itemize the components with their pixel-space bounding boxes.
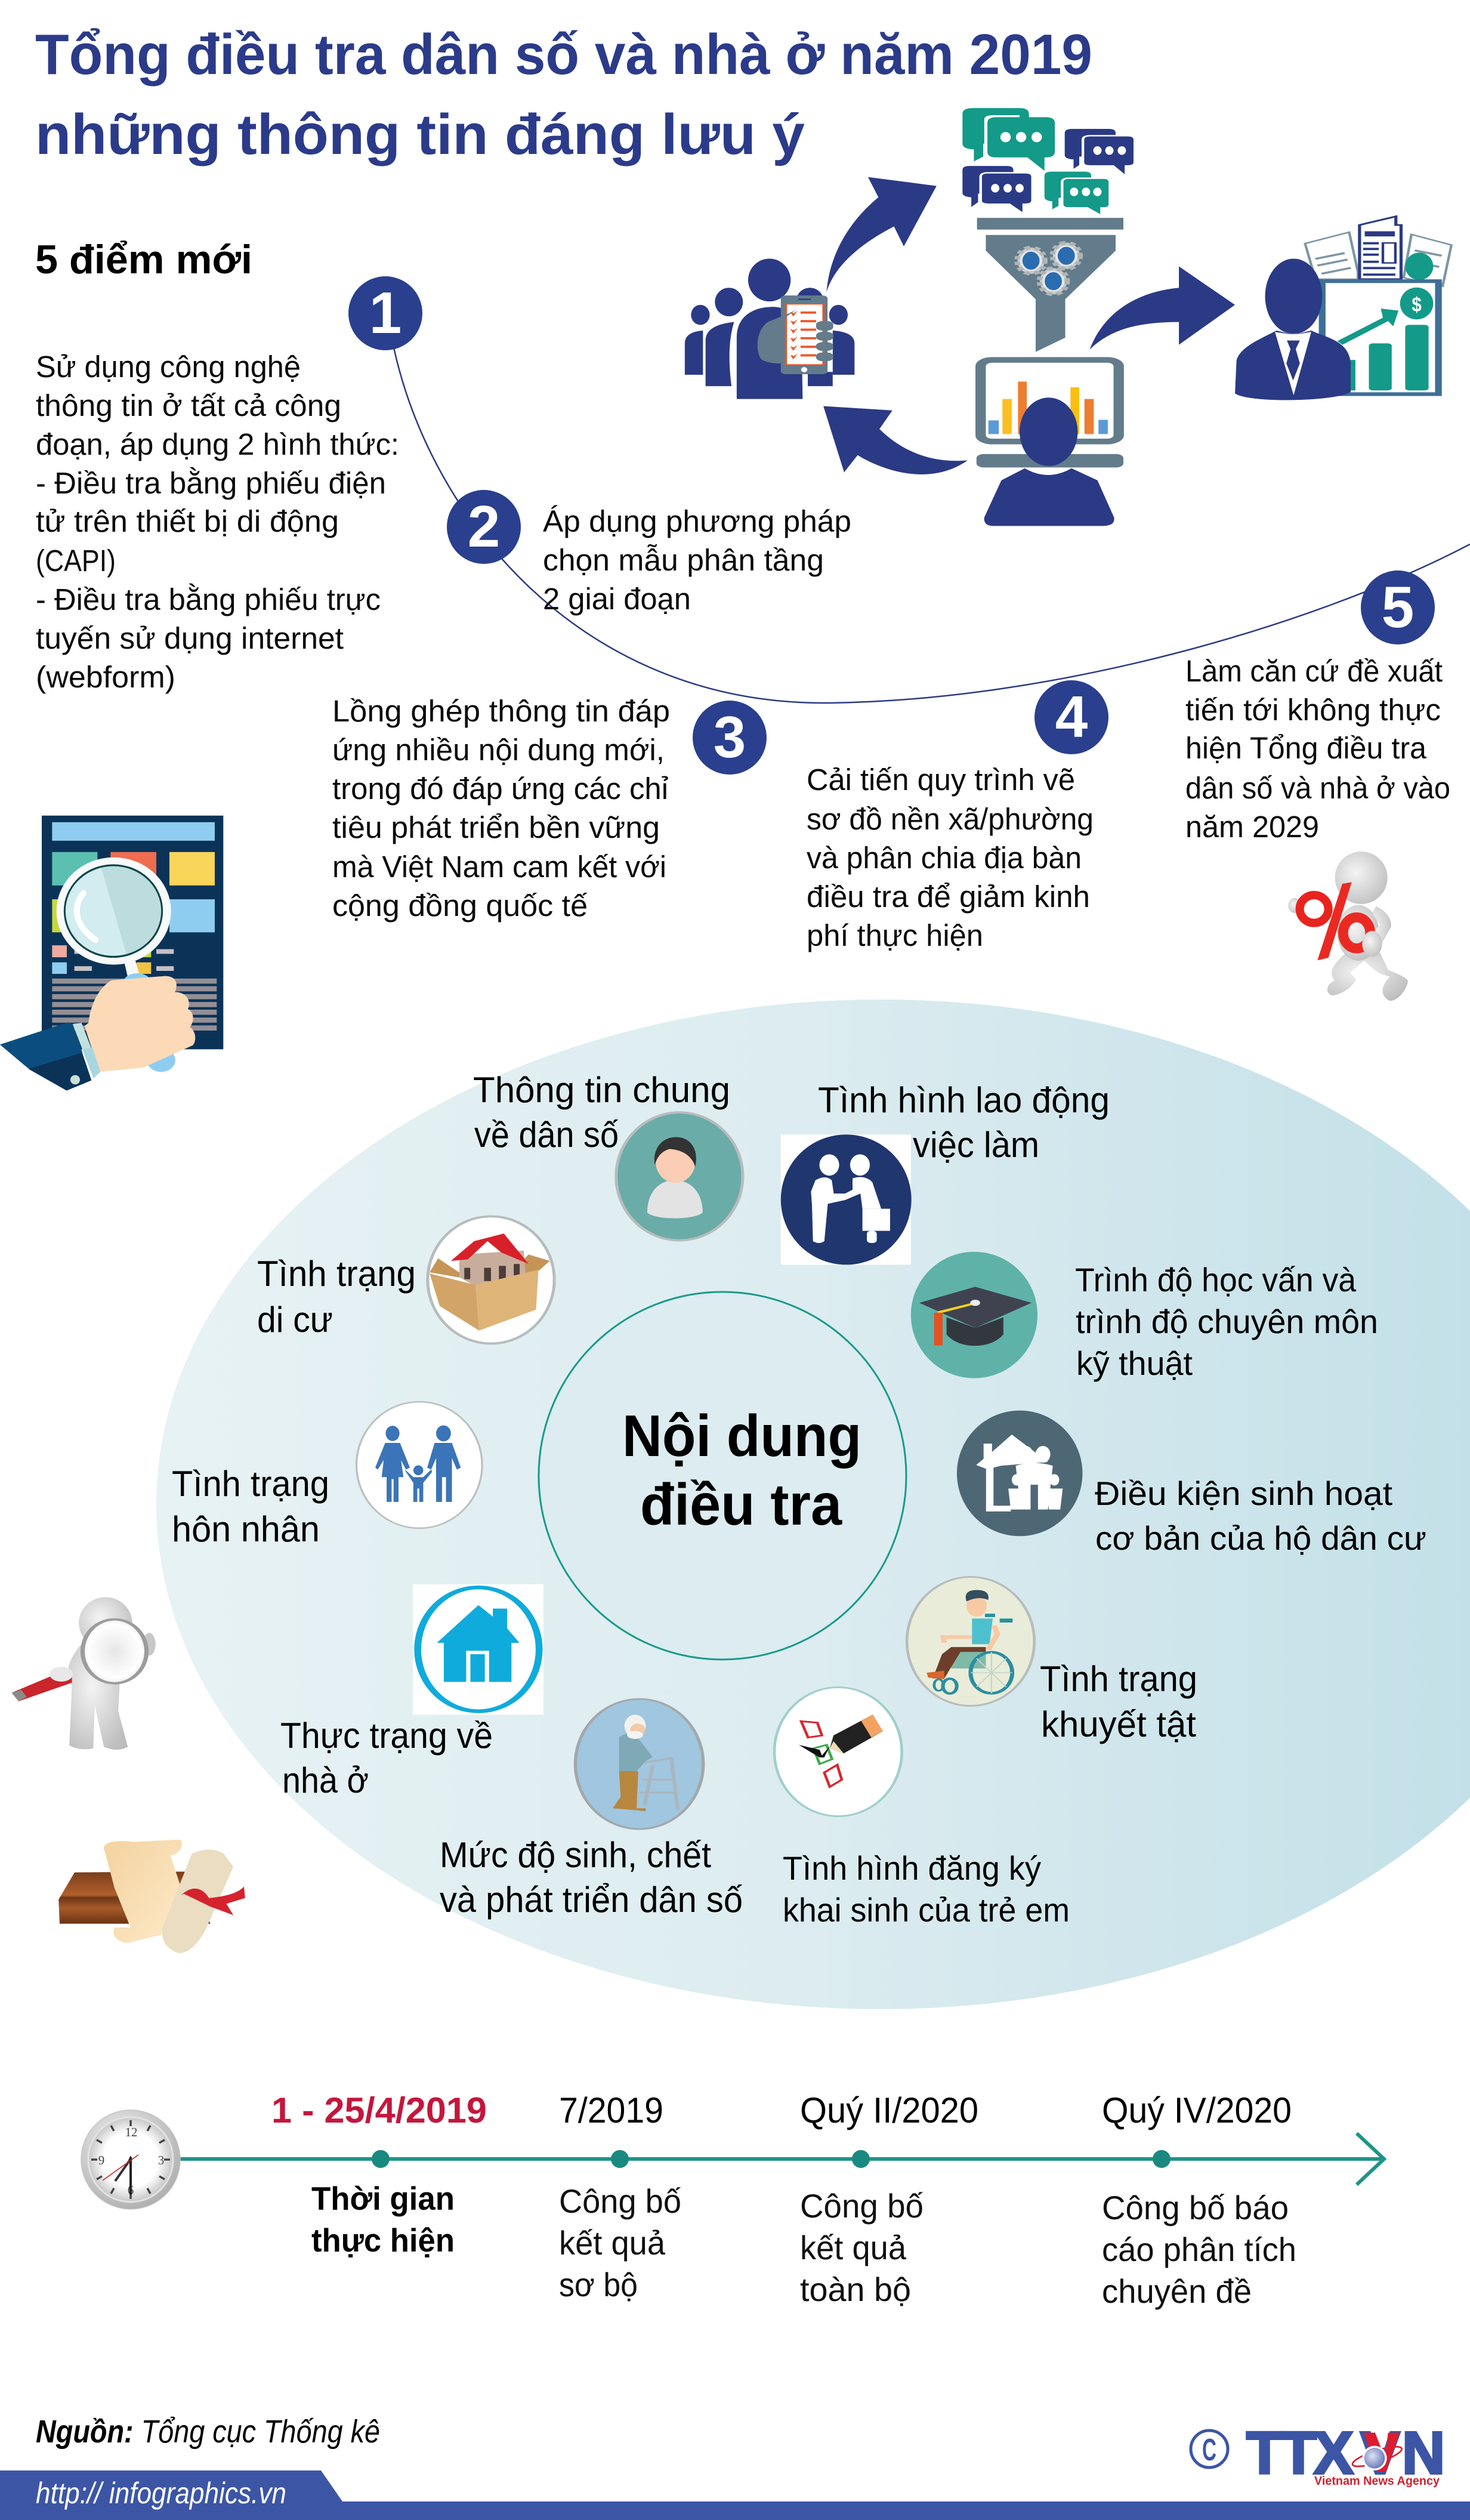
icon: clock: 12 [125, 2125, 137, 2139]
icon: analyst with chart and newspapers [1235, 217, 1452, 400]
logo: TTXVN: C [1202, 2433, 1216, 2467]
text: point 3: mà Việt Nam cam kết với [332, 850, 666, 884]
timeline: 1 - 25/4/2019: thực hiện [311, 2222, 455, 2259]
label: housing: Thực trạng về [280, 1716, 493, 1756]
text: point 1: - Điều tra bằng phiếu trực [36, 582, 381, 616]
label: migration: di cư [257, 1300, 333, 1340]
icon: speech bubbles [962, 108, 1135, 216]
timeline: 1 - 25/4/2019 [271, 2090, 487, 2259]
label: labour: Tình hình lao động [818, 1080, 1110, 1120]
text: point 1: Sử dụng công nghệ [36, 350, 301, 384]
footer url: http:// infographics.vn [36, 2476, 286, 2510]
label: education [1075, 1261, 1378, 1382]
text: point 2: Áp dụng phương pháp [543, 504, 851, 538]
number 3: 3 [714, 704, 746, 770]
illustration: magnifier on document [0, 816, 223, 1091]
icon: clock [81, 2110, 180, 2209]
icon: migration house in box [428, 1216, 554, 1343]
text: point 4: sơ đồ nền xã/phường [807, 802, 1094, 836]
text: point 4: điều tra để giảm kinh [807, 880, 1090, 914]
center circle: Nội dung điều tra: điều tra [640, 1472, 842, 1537]
text: point 2 [543, 504, 851, 616]
text: point 3: cộng đồng quốc tế [332, 889, 588, 923]
timeline: 7/2019: Công bố [559, 2182, 681, 2220]
timeline: Quý II/2020: Quý II/2020 [800, 2090, 978, 2130]
illustration: figure with magnifier [12, 1597, 156, 1750]
logo: TTXVN: TTXVN [1246, 2420, 1445, 2487]
text: point 5: hiện Tổng điều tra [1185, 731, 1427, 765]
timeline: 7/2019: 7/2019 [559, 2090, 663, 2130]
title: những thông tin đáng lưu ý [35, 103, 805, 166]
number 2: 2 [468, 493, 500, 559]
text: point 5: năm 2029 [1185, 810, 1319, 844]
timeline: Quý IV/2020: cáo phân tích [1102, 2231, 1296, 2268]
label: housing: nhà ở [282, 1760, 369, 1800]
source: Nguồn: Tổng cục Thống kê [36, 2414, 380, 2450]
text: point 1: - Điều tra bằng phiếu điện [36, 466, 386, 500]
icon: funnel with gears [977, 218, 1123, 352]
timeline: 7/2019: sơ bộ [559, 2266, 638, 2303]
illustration: data cycle [685, 108, 1452, 526]
label: births and deaths: Mức độ sinh, chết [440, 1835, 711, 1875]
label: marital status [172, 1464, 329, 1549]
number 1 [348, 276, 422, 350]
icon: disability wheelchair [907, 1577, 1034, 1706]
label: education: kỹ thuật [1076, 1344, 1193, 1382]
text: point 4 [807, 763, 1094, 952]
label: general population: về dân số [474, 1115, 619, 1155]
label: birth registration: khai sinh của trẻ em [783, 1891, 1070, 1929]
label: disability: Tình trạng [1040, 1659, 1197, 1699]
text: point 1: tuyến sử dụng internet [36, 621, 344, 655]
label: marital status: hôn nhân [172, 1509, 320, 1549]
text: point 2: 2 giai đoạn [543, 582, 691, 616]
timeline: Quý IV/2020 [1102, 2090, 1296, 2310]
timeline: 7/2019 [559, 2090, 681, 2303]
text: point 2: chọn mẫu phân tầng [543, 543, 824, 577]
text: point 4: phí thực hiện [807, 918, 983, 952]
icon: birth registration checklist [774, 1688, 902, 1816]
timeline: Quý IV/2020: chuyên đề [1102, 2272, 1252, 2310]
label: migration: Tình trạng [257, 1254, 416, 1294]
text: point 5: Làm căn cứ đề xuất [1185, 654, 1443, 688]
number 5: 5 [1382, 574, 1414, 640]
icon: marital status family [357, 1402, 482, 1528]
label: labour: việc làm [913, 1125, 1039, 1165]
timeline: Quý II/2020: toàn bộ [800, 2271, 911, 2308]
text: point 5: dân số và nhà ở vào [1185, 771, 1450, 805]
label: living conditions: cơ bản của hộ dân cư [1095, 1519, 1426, 1557]
text: point 3: Lồng ghép thông tin đáp [332, 694, 670, 728]
label: births and deaths [440, 1835, 743, 1920]
label: births and deaths: và phát triển dân số [440, 1880, 743, 1920]
text: point 3 [332, 694, 670, 923]
text: point 1: đoạn, áp dụng 2 hình thức: [36, 427, 399, 461]
timeline: Quý II/2020: kết quả [800, 2229, 907, 2266]
label: living conditions [1095, 1475, 1426, 1557]
timeline: 1 - 25/4/2019: 1 - 25/4/2019 [271, 2090, 487, 2130]
text: point 4: và phân chia địa bàn [807, 841, 1082, 875]
text: point 5: tiến tới không thực [1185, 693, 1441, 727]
text: point 3: trong đó đáp ứng các chỉ [332, 772, 669, 806]
number 2 [447, 490, 521, 564]
icon: elderly man with walker [575, 1699, 703, 1829]
text: point 5 [1185, 654, 1450, 844]
timeline: Quý II/2020: Công bố [800, 2187, 924, 2225]
label: marital status: Tình trạng [172, 1464, 329, 1504]
logo: TTXVN: Vietnam News Agency [1314, 2475, 1440, 2488]
text: point 4: Cải tiến quy trình vẽ [807, 763, 1075, 797]
text: point 1: (webform) [36, 660, 175, 694]
number 1: 1 [369, 280, 402, 346]
footer bar [0, 2470, 1470, 2520]
title [35, 23, 1092, 166]
arrow: phone to bubbles [826, 177, 937, 292]
text: point 1: tử trên thiết bị di động [36, 504, 339, 538]
heading: 5 điểm mới: 5 điểm mới [35, 237, 252, 282]
illustration: book and scrolls [58, 1840, 245, 1953]
icon: education cap [911, 1252, 1037, 1378]
label: birth registration: Tình hình đăng ký [783, 1849, 1041, 1887]
illustration: figure carrying percent sign [1288, 852, 1408, 1001]
label: labour [818, 1080, 1110, 1165]
text: point 3: ứng nhiều nội dung mới, [332, 733, 665, 767]
arrow: to analyst [1089, 266, 1235, 350]
label: general population: Thông tin chung [473, 1070, 730, 1110]
label: housing [280, 1716, 493, 1800]
timeline: axis and arrow [176, 2133, 1384, 2185]
label: disability: khuyết tật [1041, 1704, 1196, 1744]
icon: clock: 6 [128, 2183, 134, 2197]
text: point 1: (CAPI) [36, 544, 116, 578]
label: migration [257, 1254, 416, 1340]
label: living conditions: Điều kiện sinh hoạt [1095, 1475, 1392, 1512]
icon: clock: 9 [98, 2153, 104, 2167]
timeline: 7/2019: kết quả [559, 2224, 666, 2262]
icon: general population info [616, 1112, 743, 1241]
icon: people with phone [685, 258, 854, 399]
label: disability [1040, 1659, 1197, 1744]
label: education: trình độ chuyên môn [1076, 1303, 1378, 1340]
center circle: Nội dung điều tra [539, 1292, 906, 1660]
text: point 3: tiêu phát triển bền vững [332, 810, 660, 844]
icon: presenter at monitor [977, 360, 1123, 526]
text: point 1 [36, 350, 399, 694]
number 4: 4 [1055, 684, 1088, 749]
arrow: back to respondents [823, 406, 968, 474]
number 3 [693, 701, 767, 775]
text: point 1: thông tin ở tất cả công [36, 388, 341, 422]
label: birth registration [783, 1849, 1070, 1929]
icon: labour and employment handshake [781, 1134, 912, 1264]
timeline: Quý IV/2020: Quý IV/2020 [1102, 2090, 1292, 2130]
curve connecting the five points [388, 313, 1470, 703]
center circle: Nội dung điều tra: Nội dung [622, 1403, 861, 1469]
icon: housing [413, 1584, 543, 1714]
icon: household conditions [957, 1411, 1082, 1536]
label: general population [473, 1070, 730, 1155]
timeline: 1 - 25/4/2019: Thời gian [311, 2180, 455, 2217]
title: Tổng điều tra dân số và nhà ở năm 2019 [35, 23, 1092, 87]
timeline: Quý II/2020 [800, 2090, 978, 2308]
number 4 [1034, 680, 1108, 754]
number 5 [1361, 570, 1435, 644]
icon: analyst with chart and newspapers: $ [1412, 293, 1422, 316]
label: education: Trình độ học vấn và [1075, 1261, 1357, 1298]
icon: clock: 3 [158, 2153, 164, 2167]
panel: survey content ellipse [156, 1000, 1470, 2009]
timeline: Quý IV/2020: Công bố báo [1102, 2189, 1289, 2226]
